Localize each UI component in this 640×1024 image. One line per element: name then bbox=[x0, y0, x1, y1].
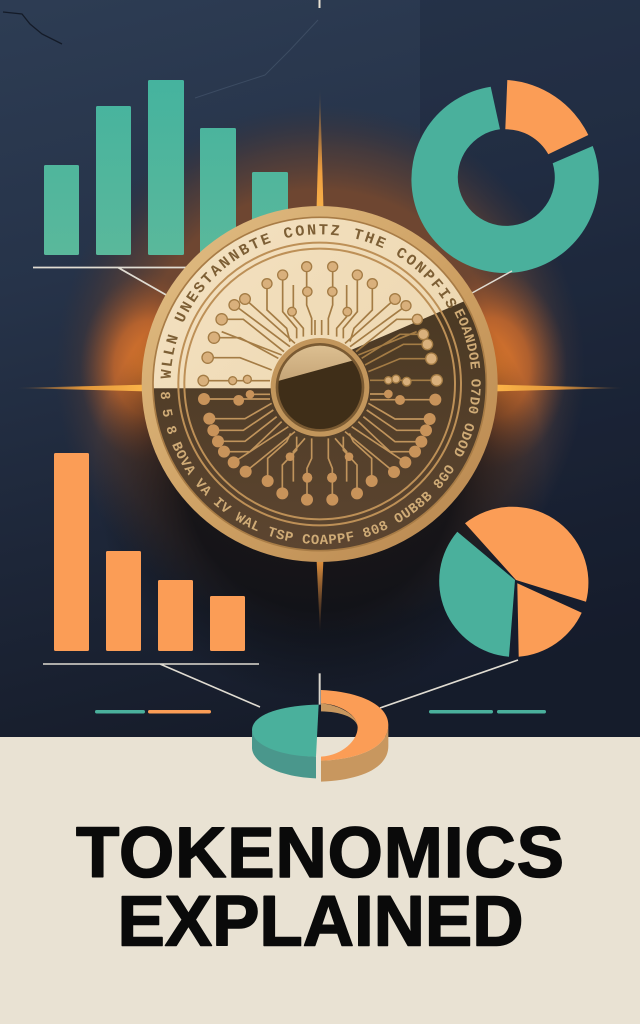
teal chart baseline and leader bbox=[33, 268, 186, 296]
legend dashes right bbox=[429, 710, 546, 714]
donut leader line bbox=[472, 271, 512, 293]
pie leader line bbox=[380, 660, 518, 708]
orange bar chart bbox=[54, 453, 245, 651]
gold coin bbox=[142, 206, 498, 562]
light flare: horizontal and vertical bbox=[15, 88, 625, 634]
coin central hub bbox=[271, 338, 369, 437]
donut orange segment bbox=[505, 80, 588, 154]
title bbox=[76, 814, 564, 962]
donut teal segment bbox=[411, 87, 599, 273]
coin rim bbox=[142, 206, 498, 562]
3D teal half disc bbox=[252, 705, 319, 778]
coin inner rings bbox=[178, 243, 461, 525]
pie chart bbox=[439, 507, 588, 657]
split divider line bbox=[319, 673, 321, 705]
orange chart baseline and leader bbox=[43, 664, 260, 707]
title line 2: EXPLAINED bbox=[118, 882, 524, 962]
pie orange small slice bbox=[517, 583, 582, 657]
pie teal slice bbox=[439, 532, 515, 657]
legend dashes left bbox=[95, 710, 211, 714]
coin circuit traces bbox=[198, 262, 442, 506]
top tick line bbox=[318, 0, 320, 8]
dark navy poster background bbox=[0, 0, 640, 737]
coin ring text top: WLLN UNESTANNBTE CONTZ THE CONPFIS bbox=[160, 224, 456, 378]
cream title panel bbox=[0, 737, 640, 1024]
pie orange large slice bbox=[465, 507, 588, 602]
coin ring text bottom: 8 5 8 BOVA VA IV WAL TSP COAPPF 808 OUB8B 8GO bbox=[160, 392, 454, 544]
3D split ring icon bbox=[252, 673, 388, 782]
coin ring text right: EOANDOE O7D0 ODOD bbox=[454, 308, 481, 456]
donut chart bbox=[411, 80, 599, 273]
teal bar chart bbox=[44, 80, 288, 255]
title line 1: TOKENOMICS bbox=[76, 814, 564, 893]
3D orange half ring bbox=[321, 690, 388, 782]
